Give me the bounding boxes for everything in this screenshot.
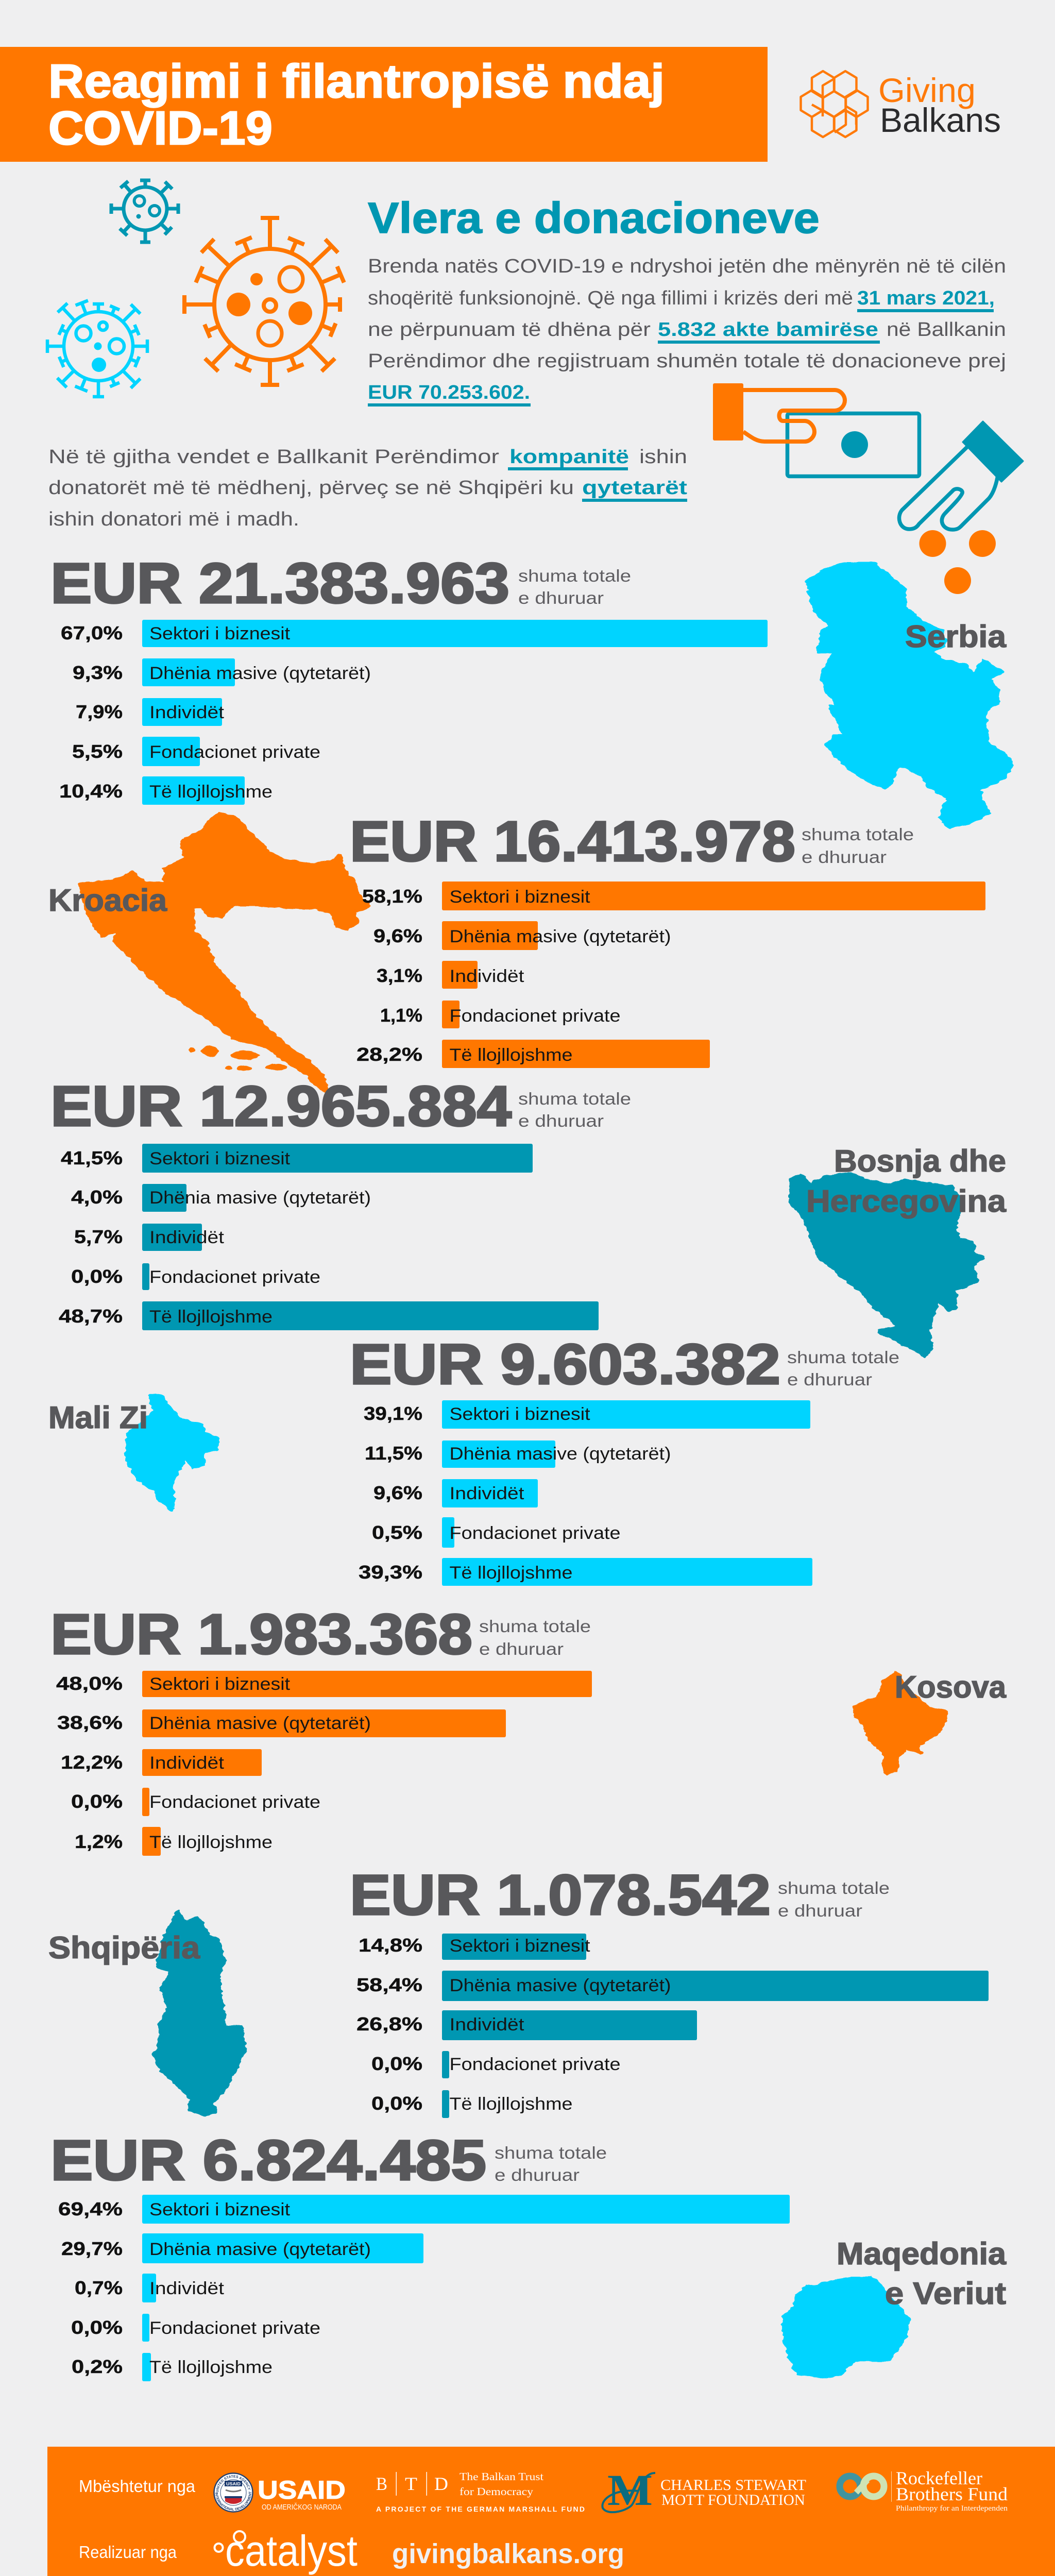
panel: footer: [47, 2447, 1055, 2576]
bar chart: Albania: Individët: [449, 2015, 524, 2035]
logo: Rockefeller Brothers Fund: Philanthropy for an Interdependen: [896, 2504, 1008, 2513]
country label: Kosovo: Kosova: [895, 1670, 1007, 1704]
country label: North Macedonia: [837, 2236, 1007, 2311]
logo: USAID: INTERNATIONAL DEVELOPMENT: [215, 2492, 251, 2511]
bar chart: Montenegro: Sektori i biznesit: [449, 1404, 590, 1424]
amount caption: [802, 825, 914, 867]
logo: The Balkan Trust for Democracy: B: [376, 2473, 387, 2494]
bar chart: Albania: Fondacionet private: [449, 2055, 620, 2074]
logo: Giving Balkans: Balkans: [880, 101, 1001, 139]
bar chart: North Macedonia: 0,7%: [75, 2277, 123, 2298]
logo: catalyst: catalyst: [225, 2527, 358, 2575]
bar chart: Montenegro: Fondacionet private: [449, 1523, 620, 1543]
amount: Montenegro: EUR 9.603.382: [350, 1333, 780, 1396]
bar chart: Albania: 0,0%: [371, 2053, 422, 2074]
bar chart: Montenegro: [359, 1400, 812, 1586]
panel: Montenegro: [48, 1333, 899, 1586]
map: Serbia: [807, 564, 1013, 827]
logo: Giving Balkans: Giving: [878, 71, 976, 109]
text block: intro paragraph: [368, 256, 1006, 406]
map: Bosnia and Herzegovina: [791, 1174, 982, 1357]
bar chart: Albania: 14,8%: [359, 1935, 422, 1956]
bar chart: Montenegro: 11,5%: [365, 1443, 422, 1464]
amount caption: [787, 1348, 899, 1389]
bar chart: North Macedonia: Dhënia masive (qytetarët): [149, 2240, 371, 2259]
logo: Charles Stewart Mott Foundation: MOTT FOUNDATION: [661, 2492, 805, 2509]
map: Kosovo: [855, 1673, 945, 1773]
text: produced by: Realizuar nga: [79, 2543, 177, 2562]
amount caption: shuma totale: [495, 2143, 607, 2162]
amount: Albania: EUR 1.078.542: [350, 1863, 771, 1927]
text block: intro paragraph: 5.832 akte bamirëse: [658, 319, 878, 341]
text block: companies were the largest donors: ishin donatori më i madh.: [48, 509, 299, 530]
bar chart: Kosovo: Të llojllojshme: [149, 1833, 273, 1852]
title: COVID-19: [48, 102, 273, 155]
bar chart: Montenegro: Dhënia masive (qytetarët): [449, 1444, 671, 1464]
title: Reagimi i filantropisë ndaj: [48, 55, 665, 108]
bar chart: Montenegro: 39,3%: [359, 1562, 422, 1583]
logo: Charles Stewart Mott Foundation: CHARLES STEWART: [660, 2477, 806, 2494]
bar chart: Serbia: 9,3%: [73, 662, 123, 683]
country label: Bosnia and Herzegovina: [806, 1144, 1007, 1218]
bar chart: North Macedonia: Sektori i biznesit: [149, 2200, 291, 2219]
bar chart: Serbia: 5,5%: [72, 741, 123, 762]
bar chart: North Macedonia: 69,4%: [58, 2198, 123, 2219]
bar chart: Bosnia and Herzegovina: Individët: [149, 1228, 225, 1247]
country label: North Macedonia: Maqedonia: [837, 2236, 1007, 2271]
bar chart: North Macedonia: 0,0%: [71, 2317, 123, 2338]
bar chart: Croatia: 9,6%: [373, 925, 422, 946]
map: Albania: [154, 1911, 244, 2115]
bar chart: Serbia: Dhënia masive (qytetarët): [149, 664, 371, 683]
bar chart: Kosovo: 1,2%: [75, 1831, 123, 1852]
logo: Charles Stewart Mott Foundation: [602, 2465, 806, 2515]
bar chart: Albania: [356, 1934, 989, 2118]
bar chart: North Macedonia: Individët: [149, 2279, 225, 2298]
logo: Rockefeller Brothers Fund: Rockefeller: [896, 2468, 982, 2488]
bar chart: Kosovo: Dhënia masive (qytetarët): [149, 1714, 371, 1733]
bar chart: Bosnia and Herzegovina: 48,7%: [59, 1306, 123, 1327]
bar chart: Bosnia and Herzegovina: Fondacionet private: [149, 1267, 320, 1287]
bar chart: Serbia: [59, 620, 768, 805]
bar chart: Croatia: Të llojllojshme: [449, 1045, 573, 1065]
bar chart: Bosnia and Herzegovina: 5,7%: [74, 1226, 123, 1247]
text: supported by: Mbështetur nga: [79, 2477, 196, 2496]
bar chart: Serbia: 10,4%: [59, 781, 123, 802]
bar chart: Montenegro: 39,1%: [364, 1403, 422, 1424]
icon: teal virus: [111, 180, 178, 242]
bar chart: Kosovo: Sektori i biznesit: [149, 1674, 291, 1694]
bar chart: Croatia: 58,1%: [362, 886, 422, 907]
logo: The Balkan Trust for Democracy: D: [434, 2473, 448, 2494]
bar chart: Kosovo: 48,0%: [56, 1673, 123, 1694]
logo: The Balkan Trust for Democracy: T: [405, 2473, 417, 2494]
bar chart: Croatia: [356, 882, 985, 1068]
bar chart: Serbia: 67,0%: [61, 622, 123, 643]
bar chart: Albania: 58,4%: [356, 1974, 422, 1995]
amount caption: shuma totale: [479, 1617, 591, 1636]
amount caption: [479, 1617, 591, 1658]
text block: intro paragraph: shoqëritë funksionojnë. Që nga fillimi i krizës deri më: [368, 287, 853, 309]
map: North Macedonia: [784, 2278, 908, 2377]
icon: cyan virus: [47, 300, 147, 397]
bar chart: Bosnia and Herzegovina: Dhënia masive (qytetarët): [149, 1188, 371, 1208]
amount caption: [495, 2143, 607, 2184]
amount caption: shuma totale: [518, 566, 631, 585]
bar chart: North Macedonia: 0,2%: [72, 2356, 123, 2377]
icon: hand dropping coins: [899, 421, 1023, 594]
logo: Rockefeller Brothers Fund: Brothers Fund: [896, 2484, 1008, 2504]
bar chart: Bosnia and Herzegovina: Sektori i biznesit: [149, 1149, 291, 1168]
bar chart: North Macedonia: Të llojllojshme: [149, 2358, 273, 2377]
amount caption: shuma totale: [802, 825, 914, 844]
amount: Serbia: EUR 21.383.963: [50, 552, 509, 615]
amount caption: e dhuruar: [518, 588, 604, 607]
map: Montenegro: [127, 1395, 218, 1510]
bar chart: Bosnia and Herzegovina: 4,0%: [71, 1187, 123, 1208]
panel: Bosnia and Herzegovina: [50, 1075, 1007, 1357]
bar chart: Montenegro: 0,5%: [372, 1522, 422, 1543]
amount caption: e dhuruar: [495, 2165, 580, 2184]
country label: North Macedonia: e Veriut: [885, 2276, 1006, 2311]
logo: Charles Stewart Mott Foundation: M: [607, 2465, 653, 2515]
bar chart: Croatia: Dhënia masive (qytetarët): [449, 927, 671, 946]
country label: Albania: Shqipëria: [48, 1930, 200, 1965]
bar chart: Croatia: Fondacionet private: [449, 1006, 620, 1026]
bar chart: Croatia: 1,1%: [380, 1005, 422, 1026]
text block: companies were the largest donors: qytetarët: [582, 477, 687, 499]
bar chart: Serbia: Fondacionet private: [149, 742, 320, 762]
title: [48, 55, 665, 155]
bar chart: Kosovo: 12,2%: [61, 1752, 123, 1773]
bar chart: North Macedonia: [58, 2195, 790, 2381]
country label: Bosnia and Herzegovina: Bosnja dhe: [834, 1144, 1006, 1178]
text block: companies were the largest donors: [48, 446, 687, 530]
panel: Albania: [48, 1863, 989, 2118]
text block: intro paragraph: ne përpunuam të dhëna për: [368, 319, 651, 341]
bar chart: Serbia: Të llojllojshme: [149, 782, 273, 802]
logo: The Balkan Trust for Democracy: A PROJECT OF THE GERMAN MARSHALL FUND: [376, 2505, 585, 2513]
logo: The Balkan Trust for Democracy: for Democracy: [460, 2485, 534, 2498]
amount caption: shuma totale: [787, 1348, 899, 1367]
text block: intro paragraph: 31 mars 2021,: [857, 287, 995, 309]
bar chart: Bosnia and Herzegovina: 41,5%: [61, 1147, 123, 1168]
text block: intro paragraph: EUR 70.253.602.: [368, 382, 530, 403]
amount caption: [518, 1089, 631, 1130]
bar chart: Croatia: 28,2%: [356, 1044, 422, 1065]
country label: Montenegro: Mali Zi: [48, 1400, 148, 1435]
bar chart: Montenegro: 9,6%: [373, 1482, 422, 1503]
logo: Giving Balkans: [801, 71, 1001, 139]
text block: companies were the largest donors: Në të gjitha vendet e Ballkanit Perëndimor: [48, 446, 499, 468]
bar chart: Albania: 26,8%: [356, 2013, 422, 2035]
bar chart: Kosovo: 0,0%: [71, 1791, 123, 1812]
panel: Serbia: [50, 552, 1013, 827]
amount caption: e dhuruar: [802, 848, 887, 867]
icon: hand giving banknote: [713, 383, 919, 476]
text block: intro paragraph: Brenda natës COVID-19 e ndryshoi jetën dhe mënyrën në të cilën: [368, 256, 1006, 277]
country label: Serbia: Serbia: [905, 619, 1007, 654]
amount: North Macedonia: EUR 6.824.485: [50, 2129, 486, 2192]
bar chart: Serbia: 7,9%: [76, 701, 123, 722]
text: website: givingbalkans.org: [392, 2538, 624, 2569]
logo: USAID: [213, 2472, 346, 2513]
logo: The Balkan Trust for Democracy: [376, 2470, 585, 2513]
bar chart: Kosovo: 38,6%: [57, 1712, 123, 1733]
bar chart: Kosovo: Fondacionet private: [149, 1792, 320, 1812]
country label: Bosnia and Herzegovina: Hercegovina: [806, 1184, 1007, 1218]
bar chart: Kosovo: [56, 1671, 592, 1856]
country label: Croatia: Kroacia: [48, 883, 167, 918]
logo: USAID: USAID: [226, 2481, 241, 2486]
bar chart: Bosnia and Herzegovina: 0,0%: [71, 1266, 123, 1287]
map: Croatia: [79, 814, 370, 1093]
bar chart: Montenegro: Të llojllojshme: [449, 1563, 573, 1583]
text block: intro paragraph: Perëndimor dhe regjistruam shumën totale të donacioneve prej: [368, 350, 1006, 372]
logo: USAID: OD AMERIČKOG NARODA: [262, 2503, 342, 2512]
bar chart: North Macedonia: 29,7%: [61, 2238, 123, 2259]
bar chart: Albania: Të llojllojshme: [449, 2094, 573, 2114]
amount caption: e dhuruar: [778, 1901, 862, 1920]
amount: Kosovo: EUR 1.983.368: [50, 1603, 472, 1666]
bar chart: Serbia: Individët: [149, 703, 225, 722]
panel: Kosovo: [50, 1603, 1007, 1856]
amount caption: e dhuruar: [787, 1370, 872, 1389]
text block: companies were the largest donors: donatorët më të mëdhenj, përveç se në Shqipëri ku: [48, 477, 574, 499]
amount caption: [778, 1878, 890, 1920]
text block: companies were the largest donors: kompanitë: [509, 446, 629, 468]
amount: Croatia: EUR 16.413.978: [350, 810, 795, 873]
text block: companies were the largest donors: ishin: [639, 446, 687, 468]
logo: USAID: UNITED STATES AGENCY: [216, 2475, 250, 2493]
bar chart: Montenegro: Individët: [449, 1484, 524, 1503]
amount caption: [518, 566, 631, 607]
heading: Vlera e donacioneve: Vlera e donacioneve: [368, 194, 820, 242]
amount caption: shuma totale: [778, 1878, 890, 1897]
bar chart: Kosovo: Individët: [149, 1753, 225, 1773]
header banner: [0, 47, 768, 162]
amount caption: e dhuruar: [479, 1639, 564, 1658]
amount caption: e dhuruar: [518, 1111, 604, 1130]
logo: The Balkan Trust for Democracy: The Balkan Trust: [460, 2470, 543, 2483]
icon: orange virus: [184, 218, 344, 385]
logo: USAID: USAID: [258, 2476, 346, 2504]
bar chart: Albania: Sektori i biznesit: [449, 1936, 590, 1956]
bar chart: North Macedonia: Fondacionet private: [149, 2318, 320, 2338]
amount caption: shuma totale: [518, 1089, 631, 1108]
logo: Rockefeller Brothers Fund: [840, 2468, 1008, 2513]
panel: North Macedonia: [50, 2129, 1007, 2381]
bar chart: Croatia: 3,1%: [377, 965, 422, 986]
panel: Croatia: [48, 810, 985, 1093]
bar chart: Bosnia and Herzegovina: Të llojllojshme: [149, 1307, 273, 1327]
bar chart: Croatia: Sektori i biznesit: [449, 887, 590, 907]
bar chart: Croatia: Individët: [449, 967, 524, 986]
bar chart: Albania: Dhënia masive (qytetarët): [449, 1976, 671, 1995]
text block: intro paragraph: në Ballkanin: [887, 319, 1006, 341]
bar chart: Serbia: Sektori i biznesit: [149, 624, 291, 643]
amount: Bosnia and Herzegovina: EUR 12.965.884: [50, 1075, 512, 1138]
bar chart: Bosnia and Herzegovina: [59, 1144, 599, 1330]
bar chart: Albania: 0,0%: [371, 2093, 422, 2114]
